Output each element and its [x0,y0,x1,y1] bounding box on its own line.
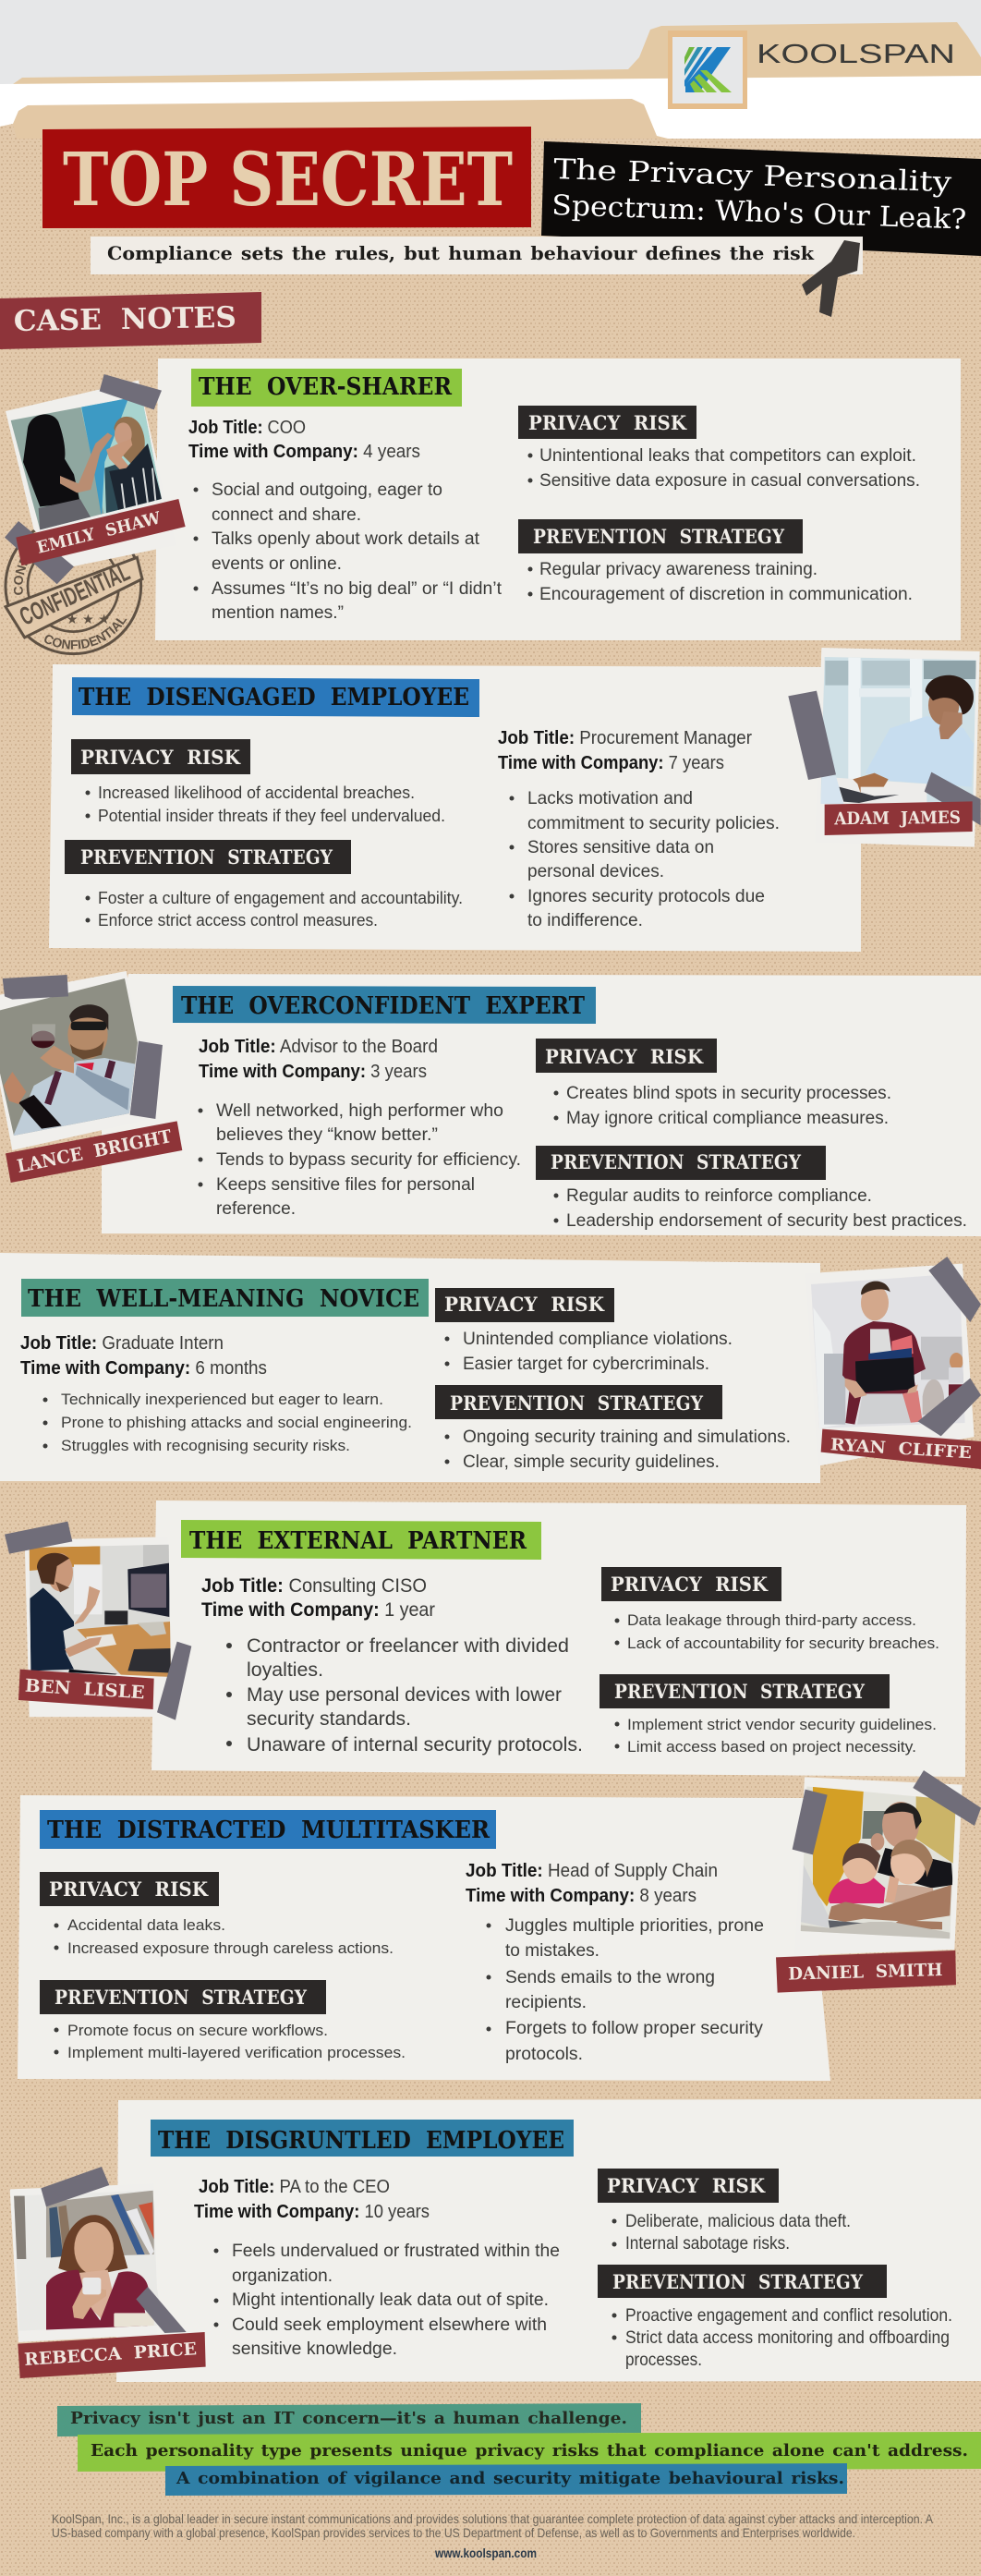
traits: Struggles with recognising security risks. [61,1437,350,1454]
name tag [776,1950,956,1993]
panel: the disengaged employee [49,664,861,952]
title banner [541,141,981,256]
tape [41,2167,187,2333]
traits: security standards. [247,1708,411,1730]
prevention strategy: Proactive engagement and conflict resolution. [625,2306,952,2326]
privacy risk [601,1567,939,1652]
closing strip: personality types: Each personality type presents unique privacy risks that compliance alone can't address. [91,2441,968,2461]
prevention strategy: processes. [625,2351,702,2370]
tape [918,1257,981,1436]
prevention strategy: Limit access based on project necessity. [627,1738,916,1756]
name tag: ADAM JAMES [833,808,961,829]
privacy risk [71,739,445,825]
privacy risk: Increased likelihood of accidental breaches. [98,784,415,802]
heading [40,1810,496,1849]
traits: commitment to security policies. [527,814,780,833]
job details: Job Title: COO [188,418,306,438]
job details [199,1037,438,1082]
traits: Feels undervalued or frustrated within the [232,2242,560,2261]
title banner: Spectrum: Who's Our Leak? [551,189,967,237]
heading: THE OVER-SHARER [199,373,452,401]
job details: Time with Company: 10 years [194,2202,430,2222]
name tag [821,1429,981,1469]
traits: Juggles multiple priorities, prone [505,1916,764,1936]
title stamp: TOP SECRET: TOP SECRET [63,136,513,223]
panel: the well-meaning novice [0,1253,820,1483]
photo: Daniel Smith [776,1770,981,1993]
tape [5,374,162,584]
job details: Job Title: PA to the CEO [199,2177,390,2197]
job details: Time with Company: 7 years [498,753,724,773]
privacy risk: PRIVACY RISK [545,1045,704,1068]
prevention strategy: Implement multi-layered verification processes. [67,2044,406,2061]
job details: Job Title: Head of Supply Chain [466,1861,718,1881]
traits: Contractor or freelancer with divided [247,1635,569,1657]
traits: events or online. [212,554,342,574]
job details [194,2177,430,2222]
job details: Time with Company: 8 years [466,1886,696,1906]
traits [198,1101,521,1219]
traits [214,2242,560,2359]
photo: Ben Lisle [5,1522,191,1720]
job details [201,1575,435,1621]
traits: believes they “know better.” [216,1125,438,1145]
traits: Forgets to follow proper security [505,2019,764,2038]
traits: personal devices. [527,862,664,881]
folder header [0,0,981,185]
privacy risk: Data leakage through third-party access. [627,1611,916,1629]
traits: Prone to phishing attacks and social engineering. [61,1414,412,1431]
privacy risk: PRIVACY RISK [49,1877,209,1901]
subtitle strip: Compliance sets the rules, but human behaviour defines the risk [107,242,815,264]
closing strip: human challenge: Privacy isn't just an IT concern—it's a human challenge. [70,2409,627,2428]
footer: website: www.koolspan.com [434,2546,537,2560]
name tag: BEN LISLE [24,1675,145,1703]
heading: THE DISGRUNTLED EMPLOYEE [158,2127,564,2155]
prevention strategy [65,840,463,930]
tape [788,691,981,825]
heading: THE OVERCONFIDENT EXPERT [181,992,586,1020]
panel: the over-sharer [155,358,961,640]
prevention strategy: Foster a culture of engagement and accountability. [98,889,463,907]
privacy risk: Easier target for cybercriminals. [463,1355,709,1374]
photo: Ryan Cliffe [805,1257,981,1469]
prevention strategy: PREVENTION STRATEGY [450,1391,704,1415]
heading: THE WELL-MEANING NOVICE [28,1285,419,1313]
prevention strategy: PREVENTION STRATEGY [612,2270,864,2293]
closing strip: vigilance [165,2463,847,2496]
prevention strategy: Ongoing security training and simulations. [463,1428,791,1447]
name tag: LANCE BRIGHT [15,1125,174,1177]
panel: the overconfident expert [102,974,981,1236]
traits: Well networked, high performer who [216,1101,503,1121]
heading [21,1279,429,1317]
panel: the external partner [151,1501,966,1777]
heading: THE DISENGAGED EMPLOYEE [79,684,469,711]
prevention strategy: Regular privacy awareness training. [539,560,818,579]
privacy risk [518,406,920,491]
prevention strategy: PREVENTION STRATEGY [533,525,785,548]
prevention strategy: Enforce strict access control measures. [98,911,378,930]
name tag [825,801,973,835]
prevention strategy [40,1980,406,2061]
prevention strategy: PREVENTION STRATEGY [54,1986,308,2009]
traits: Unaware of internal security protocols. [247,1734,583,1756]
prevention strategy [518,519,913,604]
privacy risk: Increased exposure through careless actions. [67,1939,394,1957]
traits: connect and share. [212,505,361,525]
traits: May use personal devices with lower [247,1684,562,1706]
traits [194,480,503,623]
privacy risk: PRIVACY RISK [611,1573,769,1596]
prevention strategy [435,1385,791,1472]
traits: Ignores security protocols due [527,887,765,906]
job details: Job Title: Advisor to the Board [199,1037,438,1057]
prevention strategy: Encouragement of discretion in communication. [539,585,913,604]
stamp: confidential: CONFIDENTIAL [15,557,134,631]
name tag: REBECCA PRICE [24,2339,198,2370]
prevention strategy: Implement strict vendor security guidelines. [627,1716,937,1733]
traits: mention names.” [212,603,344,623]
logo: KoolSpan stamp [668,30,747,109]
privacy risk: Accidental data leaks. [67,1916,225,1934]
name tag [16,499,186,565]
logo wordmark: KOOLSPAN [757,40,955,69]
privacy risk: Unintentional leaks that competitors can exploit. [539,446,916,466]
privacy risk: PRIVACY RISK [607,2174,766,2197]
traits [226,1635,583,1756]
privacy risk: PRIVACY RISK [444,1293,605,1316]
stamp: confidential: CONFIDENTIAL [44,618,127,650]
privacy risk [40,1872,394,1957]
photo: Emily Shaw [0,374,186,584]
privacy risk: Unintended compliance violations. [463,1330,733,1349]
traits: Technically inexperienced but eager to learn. [61,1391,383,1408]
tape [5,1522,191,1720]
privacy risk: Creates blind spots in security processes. [566,1084,891,1103]
job details: Time with Company: 3 years [199,1062,427,1082]
prevention strategy [536,1146,967,1231]
job details [188,418,420,462]
prevention strategy: Strict data access monitoring and offboarding [625,2328,950,2348]
traits: Assumes “It’s no big deal” or “I didn’t [212,579,503,599]
traits: to mistakes. [505,1941,600,1961]
privacy risk: PRIVACY RISK [528,411,687,434]
prevention strategy: Promote focus on secure workflows. [67,2022,328,2039]
heading [191,369,462,407]
prevention strategy [600,1674,937,1756]
privacy risk [536,1039,891,1128]
privacy risk: Deliberate, malicious data theft. [625,2212,851,2231]
traits: Might intentionally leak data out of spite. [232,2290,549,2310]
job details: Job Title: Procurement Manager [498,728,752,748]
section tag: case notes [0,292,261,349]
name tag: EMILY SHAW [35,508,164,558]
heading [72,677,479,717]
traits [510,789,780,930]
name tag: RYAN CLIFFE [830,1435,972,1463]
traits [42,1391,412,1454]
closing strip: personality types [78,2432,981,2472]
job details: Job Title: Graduate Intern [20,1333,224,1354]
traits: organization. [232,2266,333,2286]
closing strip: human challenge [57,2403,641,2436]
privacy risk: Internal sabotage risks. [625,2234,790,2254]
closing strip: vigilance: A combination of vigilance and security mitigate behavioural risks. [176,2469,844,2488]
prevention strategy: PREVENTION STRATEGY [551,1150,802,1173]
traits: reference. [216,1199,296,1219]
privacy risk: Sensitive data exposure in casual conversations. [539,471,920,491]
job details [466,1861,718,1906]
privacy risk: May ignore critical compliance measures. [566,1109,889,1128]
job details [20,1333,267,1379]
title banner: The Privacy Personality [553,153,952,199]
footer: company description: US-based company with a global presence, KoolSpan provides services to the US Department of Defense, as well as to Governments and Enterprises worldwide. [52,2525,855,2540]
prevention strategy: Regular audits to reinforce compliance. [566,1186,872,1206]
photo: Lance Bright [0,971,182,1183]
traits: recipients. [505,1993,587,2012]
traits: protocols. [505,2045,583,2064]
section tag: case notes: CASE NOTES [14,301,236,338]
traits: to indifference. [527,911,643,930]
prevention strategy: Leadership endorsement of security best practices. [566,1211,967,1231]
photo: Rebecca Price [10,2167,206,2378]
panel: the distracted multitasker [18,1795,830,2081]
traits: loyalties. [247,1659,323,1681]
job details: Job Title: Consulting CISO [201,1575,427,1597]
tape [793,1770,981,1854]
subtitle strip [91,237,863,274]
prevention strategy: Clear, simple security guidelines. [463,1452,720,1472]
tape [3,975,163,1119]
footer: company description [52,2511,934,2540]
privacy risk [435,1288,733,1374]
traits: Sends emails to the wrong [505,1968,715,1987]
traits: Could seek employment elsewhere with [232,2315,547,2335]
job details: Time with Company: 1 year [201,1599,435,1621]
name tag [18,2332,206,2378]
prevention strategy: PREVENTION STRATEGY [614,1680,866,1703]
name tag: DANIEL SMITH [788,1960,943,1985]
heading: THE DISTRACTED MULTITASKER [47,1817,490,1844]
heading [151,2120,574,2157]
heading [181,1520,541,1560]
traits: Lacks motivation and [527,789,693,808]
traits: sensitive knowledge. [232,2339,397,2359]
panel: the disgruntled employee [116,2099,981,2382]
prevention strategy [598,2265,952,2370]
stamp: confidential: ★ ★ ★ [67,613,110,627]
privacy risk: Lack of accountability for security breaches. [627,1634,939,1652]
privacy risk [598,2169,851,2254]
traits [486,1916,764,2064]
heading: THE EXTERNAL PARTNER [189,1527,527,1555]
traits: Social and outgoing, eager to [212,480,442,500]
prevention strategy: PREVENTION STRATEGY [80,845,333,869]
stamp: confidential: CONFIDENTIAL [13,559,28,595]
icon: black ribbon [802,240,860,317]
stamp: confidential [4,529,144,656]
job details: Time with Company: 6 months [20,1358,267,1379]
traits: Stores sensitive data on [527,838,714,857]
job details: Time with Company: 4 years [188,442,420,462]
traits: Keeps sensitive files for personal [216,1175,475,1195]
heading [173,986,596,1024]
photo: Adam James [788,648,981,847]
privacy risk: Potential insider threats if they feel undervalued. [98,807,445,825]
job details [498,728,752,773]
traits: Talks openly about work details at [212,529,480,549]
traits: Tends to bypass security for efficiency. [216,1150,521,1170]
name tag [18,1670,154,1709]
privacy risk: PRIVACY RISK [80,746,241,769]
